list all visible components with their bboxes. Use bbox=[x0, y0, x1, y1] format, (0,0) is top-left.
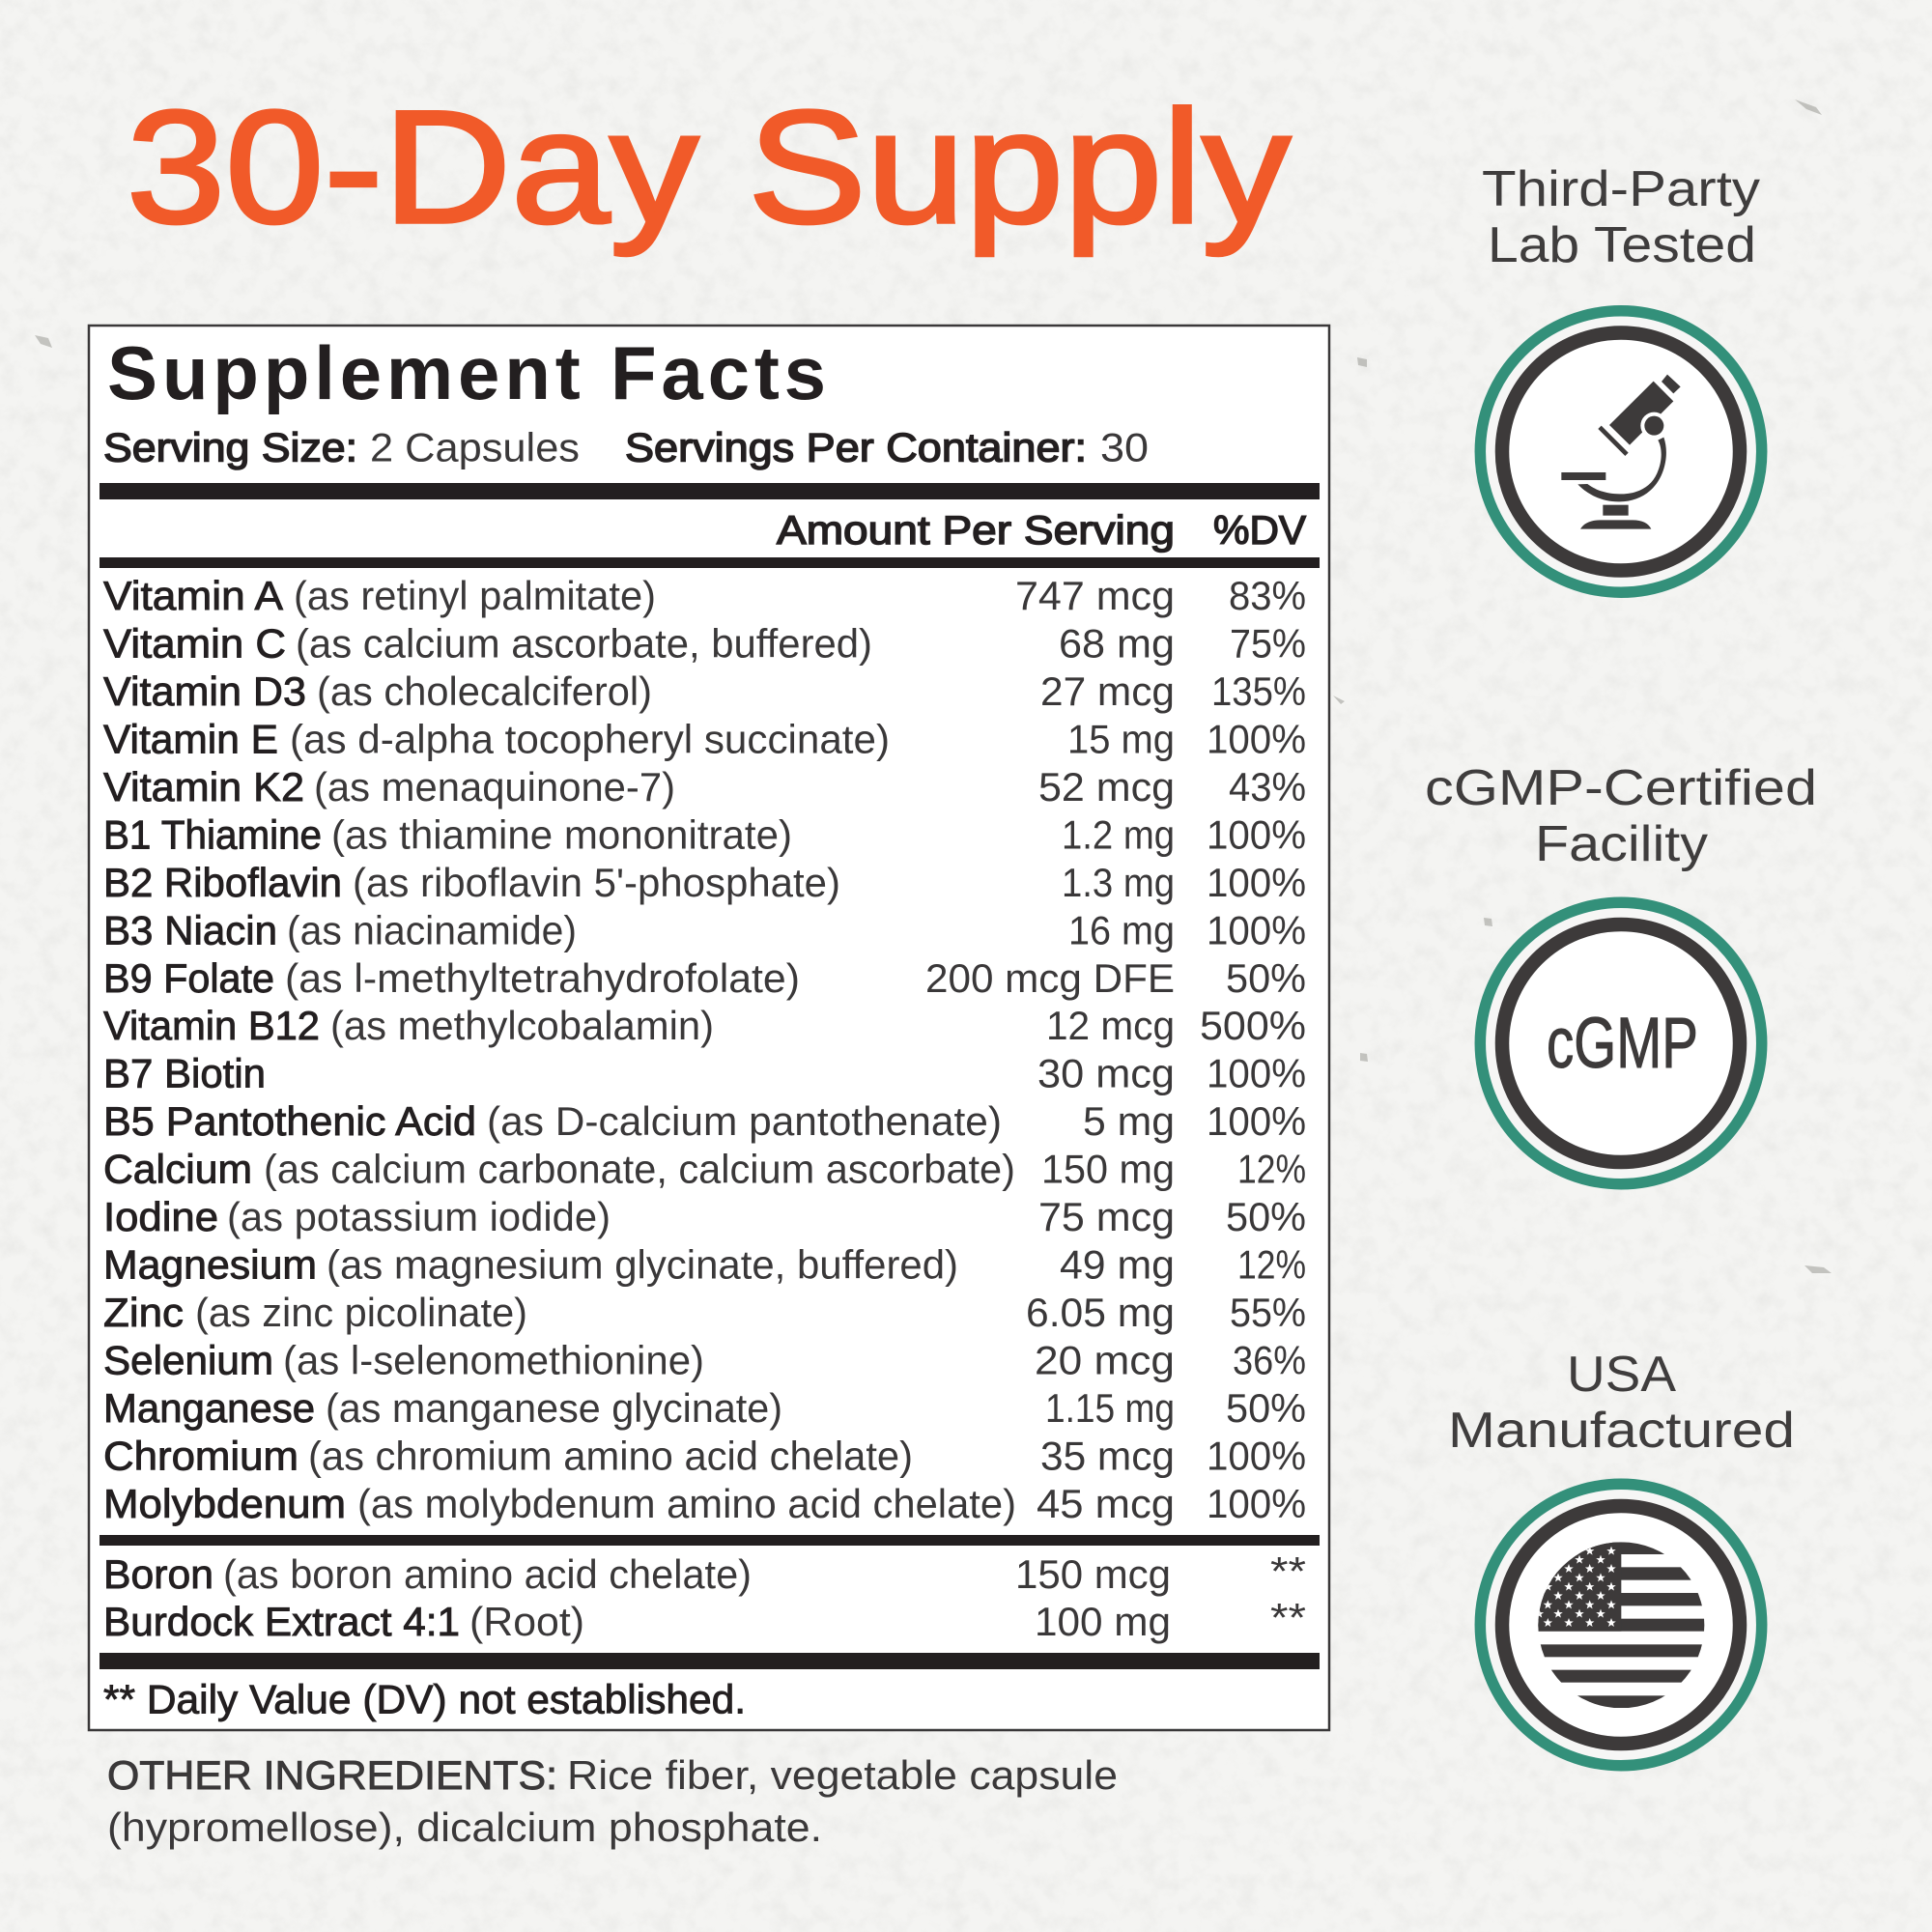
row: B3 Niacin: 100% bbox=[1207, 907, 1306, 952]
label: USA manufactured: Manufactured bbox=[1448, 1403, 1795, 1459]
row: B1 Thiamine bbox=[103, 811, 1306, 858]
row: B1 Thiamine: B1 Thiamine bbox=[103, 811, 322, 857]
row: Vitamin B12: Vitamin B12 bbox=[103, 1003, 320, 1048]
row: Vitamin D3: (as cholecalciferol) bbox=[317, 668, 652, 714]
serving information: 2 Capsules bbox=[370, 425, 580, 469]
column headers bbox=[777, 507, 1306, 553]
row: Vitamin C: 75% bbox=[1230, 621, 1306, 667]
row: Zinc: 6.05 mg bbox=[1026, 1290, 1175, 1335]
serving information: Servings Per Container: bbox=[625, 425, 1087, 469]
row: Vitamin A: 83% bbox=[1229, 573, 1306, 618]
row: Vitamin B12: (as methylcobalamin) bbox=[330, 1003, 714, 1048]
row: Manganese: 1.15 mg bbox=[1045, 1385, 1175, 1431]
row: Burdock Extract: (Root) bbox=[469, 1599, 584, 1644]
row: Molybdenum: 100% bbox=[1207, 1481, 1306, 1526]
column headers: Amount Per Serving bbox=[777, 507, 1175, 553]
serving information bbox=[103, 425, 1149, 469]
row: Vitamin K2: 43% bbox=[1229, 764, 1306, 810]
label: cGMP-certified facility: Facility bbox=[1535, 816, 1708, 872]
other ingredients bbox=[107, 1752, 1118, 1850]
row: Manganese: (as manganese glycinate) bbox=[326, 1385, 782, 1431]
label: third-party lab tested bbox=[1482, 161, 1760, 273]
row: B2 Riboflavin: (as riboflavin 5'-phosphate) bbox=[353, 860, 840, 905]
row: B1 Thiamine: 100% bbox=[1207, 811, 1306, 857]
row: Boron: Boron bbox=[103, 1551, 213, 1597]
row: Selenium bbox=[103, 1337, 1306, 1382]
icon: cGMP badge: cGMP bbox=[1547, 1003, 1698, 1083]
row: Boron: (as boron amino acid chelate) bbox=[223, 1551, 752, 1597]
row: Iodine: 75 mcg bbox=[1038, 1194, 1175, 1239]
label: third-party lab tested: Lab Tested bbox=[1488, 217, 1756, 273]
row: B1 Thiamine: 1.2 mg bbox=[1062, 811, 1175, 857]
row: Burdock Extract: ** bbox=[1270, 1595, 1306, 1640]
row: Chromium: 35 mcg bbox=[1040, 1433, 1175, 1478]
label: cGMP-certified facility bbox=[1425, 760, 1817, 872]
row: B9 Folate: (as l-methyltetrahydrofolate) bbox=[285, 955, 800, 1001]
icon: USA flag badge bbox=[1480, 1484, 1762, 1766]
row: Vitamin K2: Vitamin K2 bbox=[103, 764, 304, 810]
row: Vitamin E: Vitamin E bbox=[103, 717, 278, 762]
row: Zinc: (as zinc picolinate) bbox=[195, 1290, 527, 1335]
panel: supplement facts bbox=[89, 326, 1329, 1730]
row: Calcium: Calcium bbox=[103, 1147, 252, 1192]
row: B7 Biotin: B7 Biotin bbox=[103, 1051, 266, 1096]
row: Magnesium: 12% bbox=[1237, 1242, 1306, 1288]
serving information: 30 bbox=[1100, 425, 1149, 469]
row: Vitamin E: 15 mg bbox=[1067, 717, 1175, 762]
row: Vitamin D3 bbox=[103, 668, 1306, 714]
row: Vitamin K2 bbox=[103, 764, 1306, 810]
row: Burdock Extract bbox=[103, 1595, 1306, 1644]
row: Vitamin C: (as calcium ascorbate, buffered) bbox=[296, 621, 872, 667]
footnote: ** Daily Value (DV) not established. bbox=[103, 1677, 746, 1721]
row: B3 Niacin: (as niacinamide) bbox=[287, 907, 577, 952]
column headers: %DV bbox=[1213, 507, 1306, 553]
label: cGMP-certified facility: cGMP-Certified bbox=[1425, 760, 1817, 816]
row: B9 Folate: 200 mcg DFE bbox=[925, 955, 1175, 1001]
row: Vitamin A: (as retinyl palmitate) bbox=[294, 573, 656, 618]
label: third-party lab tested: Third-Party bbox=[1482, 161, 1760, 217]
row: B5 Pantothenic Acid: 5 mg bbox=[1083, 1098, 1175, 1144]
row: Selenium: (as l-selenomethionine) bbox=[283, 1337, 704, 1382]
row: B3 Niacin bbox=[103, 907, 1306, 952]
row: B2 Riboflavin bbox=[103, 860, 1306, 905]
row: Molybdenum: (as molybdenum amino acid chelate) bbox=[357, 1481, 1016, 1526]
row: B5 Pantothenic Acid: 100% bbox=[1207, 1098, 1306, 1144]
icon: cGMP badge bbox=[1480, 902, 1762, 1184]
serving information: Serving Size: bbox=[103, 425, 357, 469]
row: B3 Niacin: 16 mg bbox=[1068, 907, 1175, 952]
row: Burdock Extract: 100 mg bbox=[1035, 1599, 1171, 1644]
row: Vitamin E: 100% bbox=[1207, 717, 1306, 762]
row: Chromium: 100% bbox=[1207, 1433, 1306, 1478]
row: Magnesium bbox=[103, 1242, 1306, 1287]
row: Vitamin E bbox=[103, 717, 1306, 762]
row: Vitamin C bbox=[103, 621, 1306, 667]
row: B2 Riboflavin: B2 Riboflavin bbox=[103, 860, 342, 905]
row: Magnesium: (as magnesium glycinate, buffered) bbox=[327, 1242, 958, 1288]
row: Chromium bbox=[103, 1433, 1306, 1478]
row: Vitamin A: 747 mcg bbox=[1015, 573, 1175, 618]
row: Iodine: Iodine bbox=[103, 1194, 218, 1239]
nutrient rows bbox=[103, 573, 1306, 1526]
row: B1 Thiamine: (as thiamine mononitrate) bbox=[331, 811, 792, 857]
label: USA manufactured: USA bbox=[1567, 1347, 1676, 1403]
label: USA manufactured bbox=[1448, 1347, 1795, 1459]
row: Selenium: 20 mcg bbox=[1035, 1337, 1175, 1382]
row: Calcium: (as calcium carbonate, calcium ascorbate) bbox=[264, 1147, 1015, 1192]
row: Calcium: 150 mg bbox=[1041, 1147, 1175, 1192]
row: Calcium bbox=[103, 1147, 1306, 1192]
row: Vitamin D3: 135% bbox=[1211, 668, 1306, 714]
row: Vitamin B12: 500% bbox=[1200, 1003, 1306, 1048]
row: Zinc bbox=[103, 1290, 1306, 1335]
row: B7 Biotin: 100% bbox=[1207, 1051, 1306, 1096]
row: Magnesium: Magnesium bbox=[103, 1242, 317, 1288]
row: Iodine bbox=[103, 1194, 1306, 1239]
row: B2 Riboflavin: 1.3 mg bbox=[1062, 860, 1175, 905]
row: Vitamin A bbox=[103, 573, 1306, 618]
row: Vitamin D3: Vitamin D3 bbox=[103, 668, 306, 714]
row: Selenium: Selenium bbox=[103, 1337, 273, 1382]
row: B2 Riboflavin: 100% bbox=[1207, 860, 1306, 905]
row: Molybdenum: Molybdenum bbox=[103, 1481, 346, 1526]
row: B9 Folate: B9 Folate bbox=[103, 955, 274, 1001]
row: Vitamin A: Vitamin A bbox=[103, 573, 283, 618]
row: Chromium: (as chromium amino acid chelate) bbox=[308, 1433, 913, 1478]
other ingredients: OTHER INGREDIENTS: bbox=[107, 1752, 557, 1798]
row: Vitamin C: Vitamin C bbox=[103, 621, 286, 667]
row: Vitamin D3: 27 mcg bbox=[1040, 668, 1175, 714]
row: Vitamin E: (as d-alpha tocopheryl succinate) bbox=[290, 717, 890, 762]
row: Zinc: Zinc bbox=[103, 1290, 184, 1335]
other ingredients: Rice fiber, vegetable capsule bbox=[567, 1752, 1118, 1798]
row: Vitamin K2: 52 mcg bbox=[1038, 764, 1175, 810]
row: Manganese: Manganese bbox=[103, 1385, 315, 1431]
row: Calcium: 12% bbox=[1237, 1147, 1306, 1192]
row: Molybdenum: 45 mcg bbox=[1037, 1481, 1175, 1526]
row: Iodine: 50% bbox=[1226, 1194, 1306, 1239]
row: Boron: 150 mcg bbox=[1015, 1551, 1171, 1597]
row: Boron: ** bbox=[1270, 1548, 1306, 1594]
row: B3 Niacin: B3 Niacin bbox=[103, 907, 277, 952]
row: Vitamin B12 bbox=[103, 1003, 1306, 1048]
row: B5 Pantothenic Acid: B5 Pantothenic Acid bbox=[103, 1098, 476, 1144]
row: Burdock Extract: Burdock Extract 4:1 bbox=[103, 1599, 460, 1644]
row: B7 Biotin: 30 mcg bbox=[1037, 1051, 1175, 1096]
icon: microscope badge bbox=[1480, 311, 1762, 592]
row: Zinc: 55% bbox=[1230, 1290, 1306, 1335]
title: 30-Day Supply bbox=[127, 78, 1291, 257]
row: Iodine: (as potassium iodide) bbox=[227, 1194, 611, 1239]
row: Chromium: Chromium bbox=[103, 1433, 298, 1478]
row: Vitamin C: 68 mg bbox=[1059, 621, 1175, 667]
row: B9 Folate bbox=[103, 955, 1306, 1001]
row: Manganese bbox=[103, 1385, 1306, 1431]
row: B7 Biotin bbox=[103, 1051, 1306, 1096]
row: Manganese: 50% bbox=[1226, 1385, 1306, 1431]
row: Vitamin B12: 12 mcg bbox=[1046, 1003, 1175, 1048]
row: B5 Pantothenic Acid: (as D-calcium pantothenate) bbox=[487, 1098, 1002, 1144]
other ingredients: (hypromellose), dicalcium phosphate. bbox=[107, 1804, 822, 1850]
row: Magnesium: 49 mg bbox=[1060, 1242, 1175, 1288]
row: Boron bbox=[103, 1548, 1306, 1597]
row: Molybdenum bbox=[103, 1481, 1306, 1526]
row: Selenium: 36% bbox=[1233, 1337, 1306, 1382]
row: B5 Pantothenic Acid bbox=[103, 1098, 1306, 1144]
heading: Supplement Facts: Supplement Facts bbox=[107, 330, 826, 415]
row: B9 Folate: 50% bbox=[1226, 955, 1306, 1001]
row: Vitamin K2: (as menaquinone-7) bbox=[314, 764, 675, 810]
